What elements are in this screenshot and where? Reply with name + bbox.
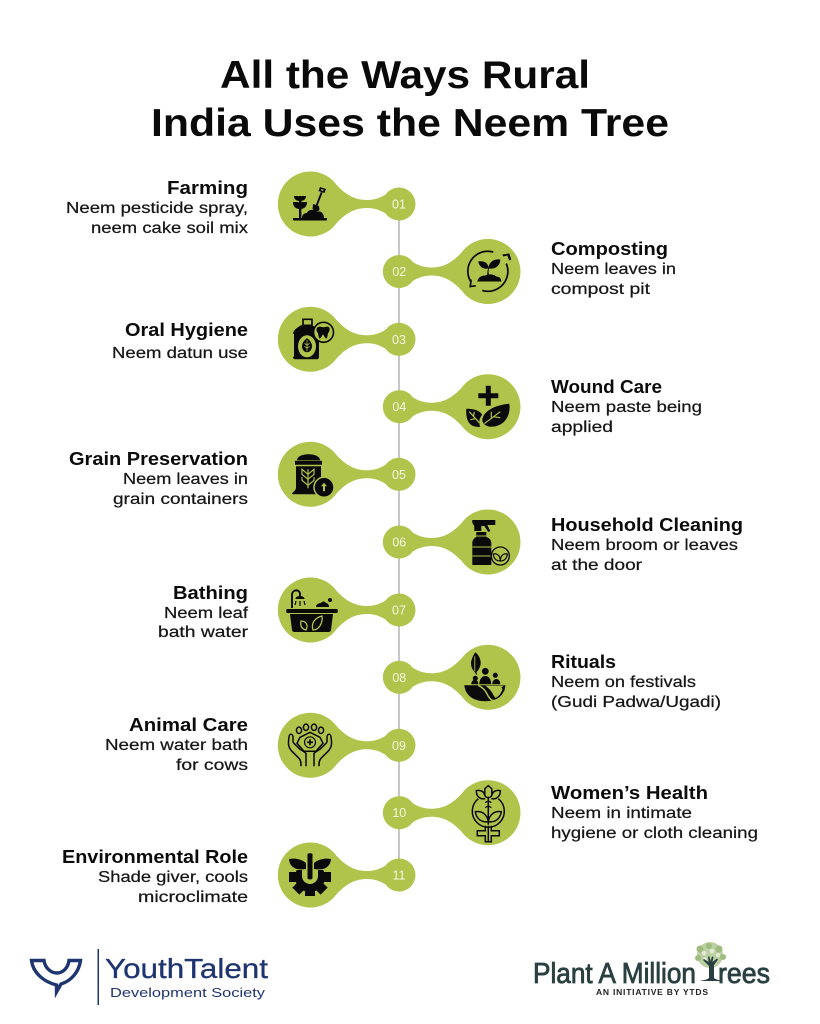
node 04 [383,374,520,439]
text: women's health: Women’s Health [551,783,708,803]
text: bathing [158,583,249,641]
text: grain preservation: grain containers [113,491,248,508]
icon: plus and leaves [466,386,510,427]
title [151,54,669,145]
node 02: 02 [392,265,406,279]
text: bathing: Bathing [173,583,248,603]
text: farming [66,178,248,237]
icon: gear with leaves [286,853,334,896]
node 04: 04 [392,400,406,414]
title: India Uses the Neem Tree [151,102,669,145]
node 07: 07 [392,604,406,618]
text: wound care: applied [551,419,613,436]
text: grain preservation [69,449,248,508]
node 10: 10 [392,806,406,820]
title: All the Ways Rural [220,54,590,97]
icon: plant and shovel [293,187,327,220]
text: animal care: Animal Care [129,715,248,735]
text: rituals [551,652,721,711]
text: composting: Neem leaves in [551,261,676,278]
text: environmental role [62,847,248,906]
text: composting: Composting [551,239,668,259]
text: composting [551,239,676,298]
text: household cleaning: at the door [551,557,642,574]
text: farming: Neem pesticide spray, [66,200,248,217]
text: oral hygiene: Neem datun use [112,345,248,362]
node 11: 11 [393,868,406,882]
node 06: 06 [392,536,406,550]
node 01 [278,172,415,236]
logo: Plant A Million Trees: Plant A Million [533,958,696,990]
item 10: women's health [383,780,758,845]
logo: Plant A Million Trees: rees [718,958,770,990]
item 08: rituals [383,645,721,711]
text: women's health: Neem in intimate [551,805,692,822]
text: oral hygiene: Oral Hygiene [125,320,248,340]
icon: leaf, people and bowl [464,652,505,701]
text: animal care [105,715,248,774]
icon: spray bottle [472,520,509,565]
item 01: farming [66,172,415,237]
node 09 [278,713,415,778]
icon: composting cycle [468,251,511,291]
text: grain preservation: Grain Preservation [69,449,248,469]
node 05: 05 [392,468,406,482]
divider [98,949,99,1005]
text: wound care: Wound Care [551,377,662,397]
text: rituals: (Gudi Padwa/Ugadi) [551,694,721,711]
node 10 [383,780,520,845]
icon: bath tub with shower [286,590,338,632]
text: women's health [551,783,758,842]
node 07 [278,578,415,642]
logo: Youth Talent Development Society: Development Society [110,985,266,1000]
node 05 [278,442,415,507]
node 03: 03 [392,333,406,347]
text: women's health: hygiene or cloth cleaning [551,825,758,842]
node 08 [383,645,520,710]
text: animal care: Neem water bath [105,737,248,754]
item 05: grain preservation [69,442,415,508]
node 02 [383,239,520,304]
icon: YTDS emblem [32,960,80,992]
node 01: 01 [392,198,406,212]
text: rituals: Neem on festivals [551,674,696,691]
node 09: 09 [392,739,406,753]
text: farming: neem cake soil mix [91,220,248,237]
item 07: bathing [158,578,415,642]
item 04: wound care [383,374,702,439]
text: grain preservation: Neem leaves in [123,471,248,488]
text: bathing: Neem leaf [164,605,249,622]
node 08: 08 [392,671,406,685]
text: wound care: Neem paste being [551,399,702,416]
text: household cleaning [551,515,743,574]
logo: Youth Talent Development Society: YouthTalent [105,953,268,984]
text: rituals: Rituals [551,652,616,672]
text: environmental role: Shade giver, cools [98,869,248,886]
text: animal care: for cows [176,757,248,774]
logo: Youth Talent Development Society [32,949,268,1005]
text: environmental role: Environmental Role [62,847,248,867]
text: composting: compost pit [551,281,651,298]
icon: tree [695,942,726,981]
item 11: environmental role [62,842,415,908]
text: household cleaning: Neem broom or leaves [551,537,738,554]
text: farming: Farming [167,178,248,198]
timeline line [398,204,400,875]
icon: female symbol with plant [472,786,504,842]
logo: Plant A Million Trees [533,942,770,997]
item 09: animal care [105,713,415,778]
node 06 [383,510,520,574]
item 03: oral hygiene [112,307,415,372]
icon: grain sack [292,454,334,497]
node 03 [278,307,415,372]
text: household cleaning: Household Cleaning [551,515,743,535]
item 02: composting [383,239,676,304]
text: environmental role: microclimate [138,889,248,906]
icon: caring hands [288,724,332,766]
item 06: household cleaning [383,510,743,574]
icon: mouthwash and tooth [293,319,334,359]
text: oral hygiene [112,320,248,362]
logo: Plant A Million Trees: AN INITIATIVE BY YTDS [596,987,708,997]
text: wound care [551,377,702,436]
text: bathing: bath water [158,624,248,641]
node 11 [278,842,415,908]
